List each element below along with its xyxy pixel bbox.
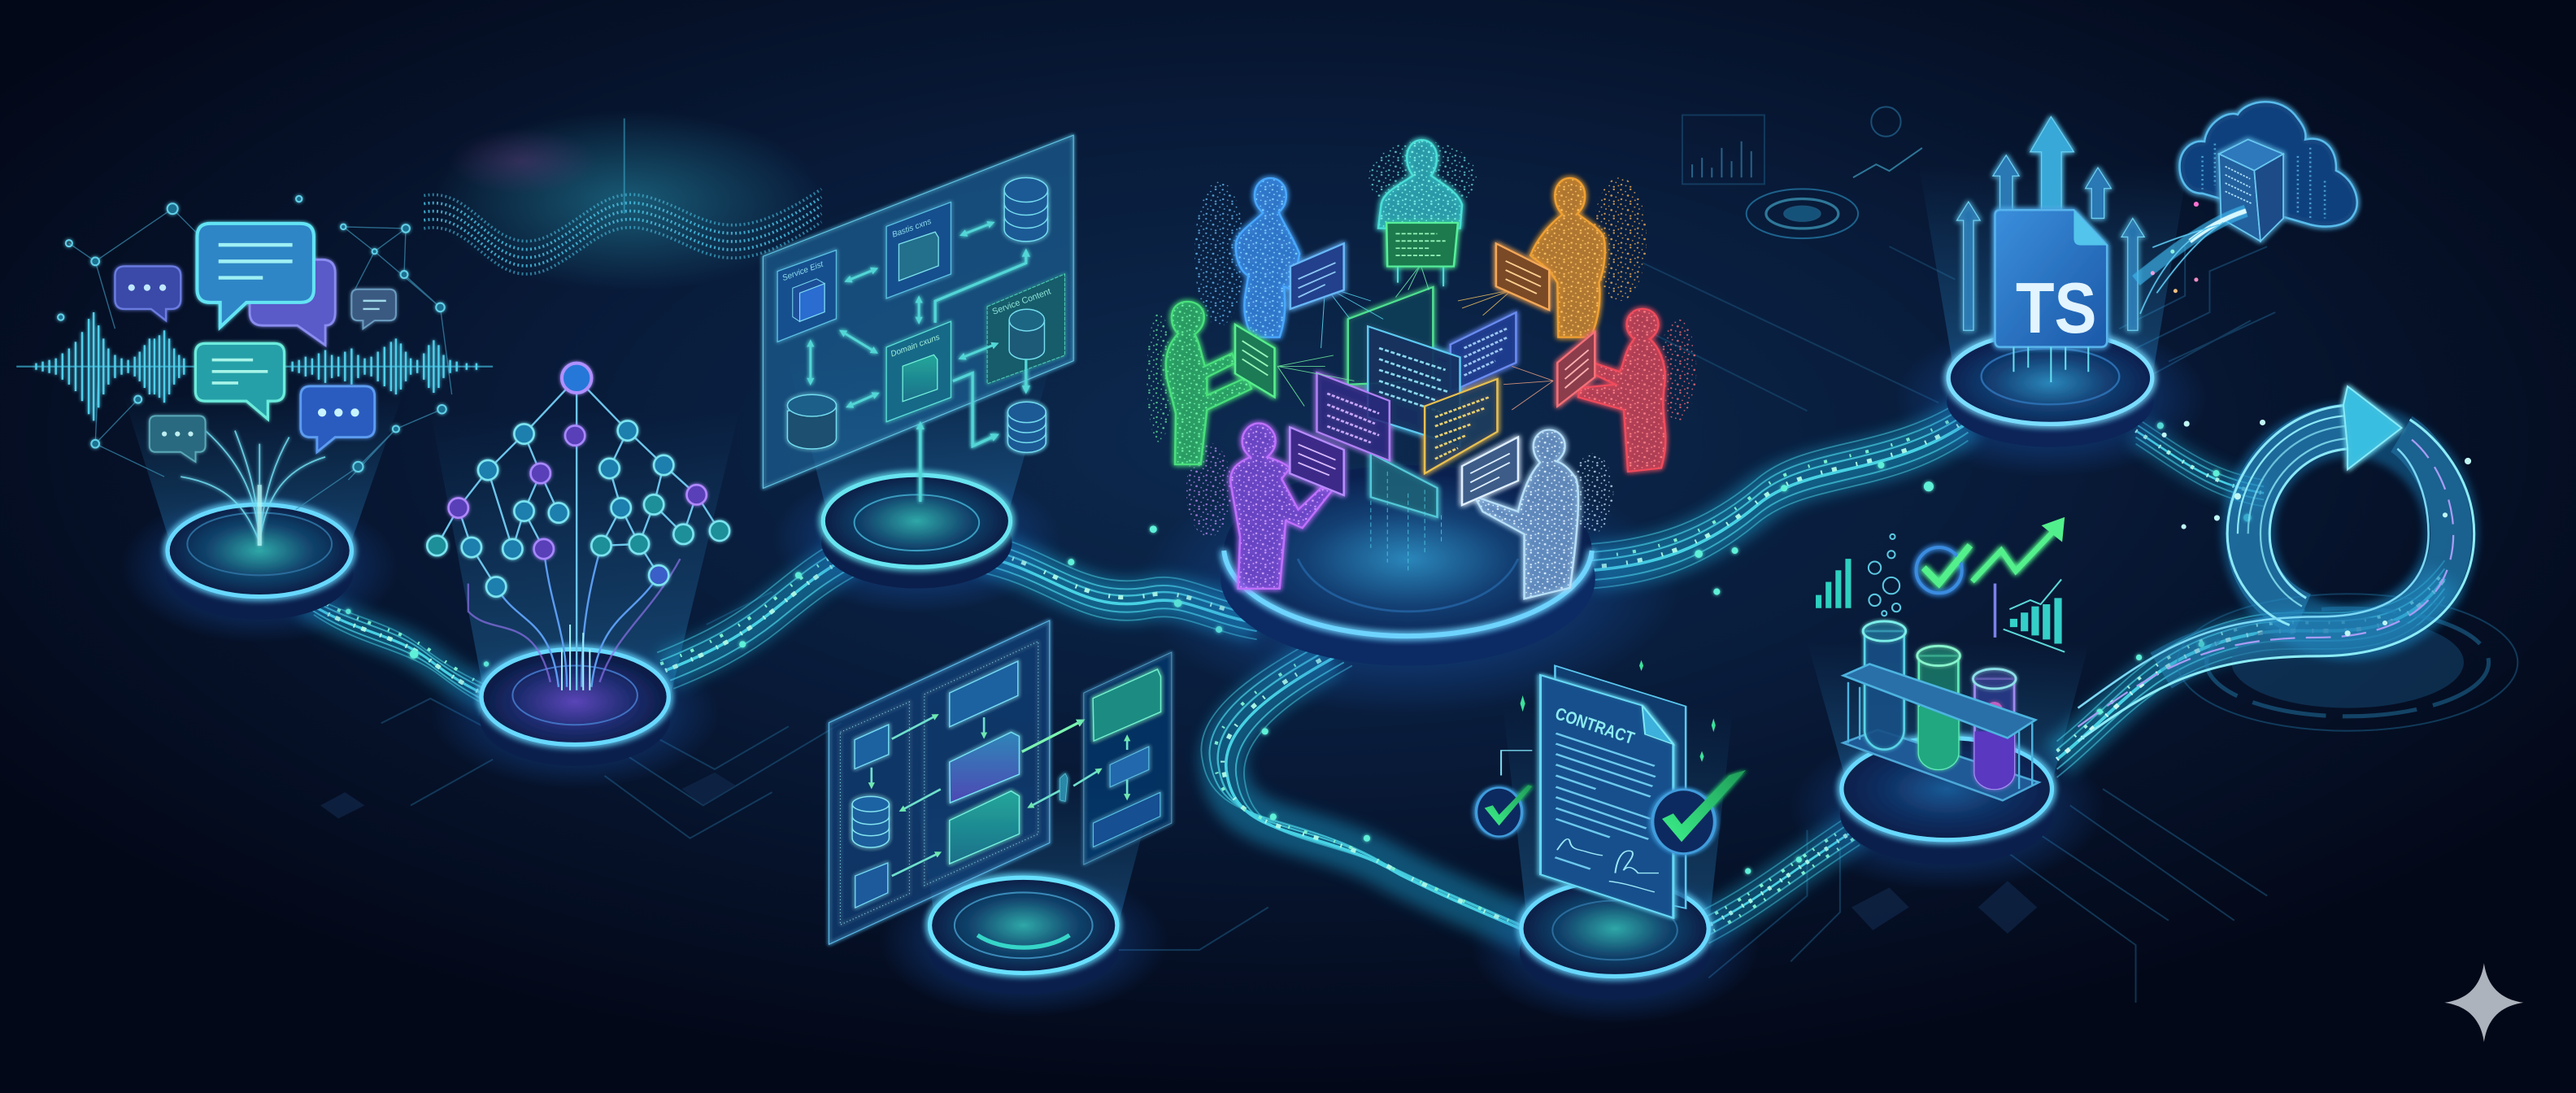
ribbon strands (2078, 405, 2474, 741)
figure: red (1557, 309, 1665, 472)
arrow stem arc (2248, 426, 2354, 615)
window: bottom teal (1371, 454, 1437, 517)
tube: green (1917, 646, 1960, 769)
loop sparks (2162, 420, 2471, 636)
data box: Bastis cxns (891, 217, 933, 240)
signatures (1557, 839, 1659, 892)
check badge (1917, 546, 1970, 593)
light beams (124, 164, 2188, 929)
domain box (886, 321, 951, 422)
bars (2013, 598, 2058, 644)
tree nodes (427, 364, 729, 597)
front sheet (1541, 675, 1673, 918)
loop glow (2248, 430, 2452, 634)
service content box: Service Content (991, 287, 1052, 317)
bubbles (1869, 534, 1900, 616)
service box: Service Eist (781, 259, 825, 283)
arrow head (2343, 386, 2401, 469)
window: blue (1368, 326, 1460, 446)
platform 8: TypeScript (1893, 319, 2208, 477)
architecture panel (763, 135, 1073, 502)
stream: team to TypeScript (1590, 396, 1968, 589)
TS document (1995, 210, 2107, 348)
service content box (987, 274, 1064, 384)
bubble: small purple (115, 266, 181, 320)
cloud server (2136, 102, 2357, 314)
domain box: Domain cxuns (890, 333, 941, 359)
fountain of light (181, 431, 325, 546)
bubble: teal (195, 343, 285, 419)
figure: light blue (1462, 430, 1578, 599)
figure: purple (1230, 424, 1344, 589)
loop arrow (2078, 386, 2474, 741)
tube: blue (1863, 621, 1906, 750)
left mini bars (1819, 559, 1848, 608)
bubble: blue dots (301, 386, 375, 452)
growth arrow head (2042, 517, 2065, 542)
platform 1: speech (120, 491, 399, 642)
stream: step 1 to 2 (294, 585, 503, 713)
stream nodes (346, 422, 2252, 874)
figure: green (1166, 302, 1274, 464)
network mesh behind chat (69, 209, 452, 510)
routed arrows (920, 252, 1026, 502)
data streams (294, 396, 2444, 947)
data box (886, 202, 951, 298)
growth arrow (1972, 529, 2055, 581)
audio waveform (16, 366, 493, 368)
window: yellow (1425, 379, 1497, 473)
check left (1476, 785, 1532, 837)
tube: purple (1973, 669, 2016, 789)
contract title: CONTRACT (1553, 704, 1637, 748)
contract document (1476, 660, 1746, 918)
stream: step 3 to team (979, 533, 1257, 639)
platform 6: contract (1470, 869, 1760, 1024)
TS document: TS (2016, 268, 2096, 348)
test tube rack (1843, 621, 2039, 800)
figure: teal (1378, 140, 1462, 286)
loop disc (2178, 594, 2517, 731)
stream: tests to loop (2057, 560, 2444, 777)
TypeScript group (1957, 116, 2144, 382)
service box (777, 250, 836, 342)
bubble: back purple (250, 259, 335, 345)
light strands under document (2013, 347, 2088, 382)
decision tree (427, 364, 729, 690)
sparkle mark (2444, 963, 2523, 1042)
stream: TypeScript to loop (2136, 417, 2264, 506)
figure: blue (1236, 178, 1344, 337)
bubble: grey (351, 290, 396, 329)
platform 5: team (1137, 460, 1679, 716)
back sheet (1555, 665, 1686, 908)
circuit traces (381, 246, 2275, 1003)
platform 3: service architecture (772, 465, 1061, 613)
faint chart and radar, top centre (1643, 107, 1955, 411)
test results icons (1869, 517, 2065, 652)
stream: step 2 to 3 (657, 536, 863, 689)
chat bubbles (115, 224, 396, 462)
platform 7: tests (1789, 726, 2104, 891)
beam sparks (2151, 202, 2199, 293)
data flow diagram (829, 621, 1172, 944)
top wave mesh (424, 110, 825, 291)
tree edges (437, 378, 720, 690)
bubble: main blue (197, 224, 314, 327)
platform 2: decision tree (430, 638, 720, 789)
service arrows (811, 223, 996, 407)
platform 4: data flow (879, 866, 1168, 1017)
chips on circuit board (320, 773, 2037, 934)
team of developers (1147, 140, 1696, 599)
window: green (1348, 287, 1433, 385)
left panel (829, 621, 1050, 944)
trend (2004, 579, 2065, 652)
check right (1652, 770, 1746, 854)
stream: team to contract (1201, 642, 1557, 945)
comet beam (2136, 211, 2246, 314)
figure: orange (1496, 178, 1605, 337)
rack top (1843, 664, 2035, 738)
upload arrows (1957, 116, 2144, 330)
bubble: grey-teal (150, 416, 206, 462)
particles (1147, 141, 1696, 537)
flow arrows (872, 716, 1127, 876)
sparkles and link (1501, 751, 1532, 776)
stream: contract to tests (1702, 808, 1860, 947)
network nodes (58, 196, 446, 472)
connection rays (1277, 264, 1553, 573)
contract text lines (1555, 734, 1656, 869)
storage cylinders (787, 178, 1047, 452)
server (2219, 139, 2283, 242)
centre code windows (1317, 287, 1516, 517)
cloud (2180, 102, 2357, 226)
window: dark blue (1451, 312, 1516, 392)
rack base (1843, 729, 2039, 800)
window: purple (1317, 372, 1390, 461)
right panel (1060, 652, 1172, 864)
up indicator (1992, 584, 1998, 638)
return ribbon (2161, 434, 2452, 671)
